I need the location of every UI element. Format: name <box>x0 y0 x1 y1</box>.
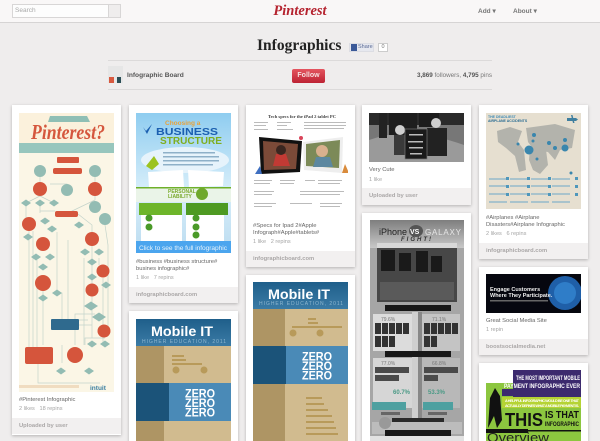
share button <box>349 43 374 52</box>
pin: social media <box>479 267 588 355</box>
caption: busines infographic# <box>136 266 189 272</box>
iphone vs galaxy image: 71.1% <box>432 317 447 323</box>
mobile IT image: ZERO <box>185 408 215 420</box>
nav: about: About ▾ <box>513 8 537 15</box>
share count: 0 <box>381 44 385 50</box>
follow button: Follow <box>297 72 320 79</box>
business structure image: LIABILITY <box>168 194 193 200</box>
flowchart image: intuit <box>90 385 107 392</box>
iphone vs galaxy image: GALAXY <box>425 228 462 237</box>
iphone vs galaxy image: 66.8% <box>432 361 447 367</box>
caption: Great Social Media Site <box>486 318 547 324</box>
mobile IT image: HIGHER EDUCATION, 2011 <box>259 301 343 307</box>
iphone vs galaxy image: 60.7% <box>393 390 411 396</box>
business structure image <box>136 113 231 253</box>
airplane map image <box>486 113 581 209</box>
mobile IT image: Mobile IT <box>151 323 213 339</box>
pin: pinterest flowchart <box>12 105 121 435</box>
airplane map image: THE DEADLIEST <box>488 115 517 119</box>
iphone vs galaxy image: FIGHT! <box>401 237 431 243</box>
stats: 2 likes 6 repins <box>486 230 526 236</box>
iphone vs galaxy image: VS <box>410 229 420 236</box>
kids photo <box>369 113 464 162</box>
business structure image: BUSINESS <box>156 127 218 138</box>
iphone vs galaxy image: 79.6% <box>381 317 396 323</box>
logo: Pinterest <box>273 3 327 19</box>
footer: Uploaded by user <box>369 193 418 199</box>
pin: mobile IT left <box>129 311 238 441</box>
business structure image: Choosing a <box>165 120 201 127</box>
footer: infographicboard.com <box>136 292 197 298</box>
pin: very cute photo <box>362 105 471 205</box>
social banner image: Engage Customers <box>490 287 540 293</box>
footer: boostsocialmedia.net <box>486 344 545 350</box>
caption: Very Cute <box>369 167 394 173</box>
footer <box>479 243 588 259</box>
search box: Search <box>15 7 36 14</box>
board thumbnail <box>108 66 123 83</box>
iphone vs galaxy image <box>370 220 464 441</box>
mobile IT image: ZERO <box>302 370 332 382</box>
footer <box>479 339 588 355</box>
mobile payment image: THIS <box>505 410 543 430</box>
business structure image: Click to see the full infographic <box>139 245 228 252</box>
footer: Uploaded by user <box>19 423 68 429</box>
footer <box>129 287 238 303</box>
mobile IT image: HIGHER EDUCATION, 2011 <box>142 339 226 345</box>
footer <box>246 251 355 267</box>
share count <box>378 43 388 52</box>
share button: Share <box>358 44 373 50</box>
footer: infographicboard.com <box>486 248 547 254</box>
caption: #business #business structure# <box>136 258 217 264</box>
business structure image: PERSONAL <box>168 189 196 195</box>
caption <box>253 222 320 236</box>
footer: infographicboard.com <box>253 256 314 262</box>
stats: 1 like 2 repins <box>253 238 291 244</box>
caption: Infograph#Apple#tablets# <box>253 230 319 236</box>
caption: #Pinterest Infographic <box>19 397 75 403</box>
footer <box>362 188 471 205</box>
ipad specs image <box>254 114 348 207</box>
ipad specs image: Tech specs for the iPad 2 tablet PC <box>268 114 336 119</box>
board info bar <box>108 60 492 90</box>
pin: business structure <box>129 105 238 303</box>
mobile IT image: ZERO <box>185 398 215 410</box>
header bar <box>0 0 600 23</box>
mobile IT image: ZERO <box>302 352 332 364</box>
mobile IT image <box>136 319 231 441</box>
pin: mobile payment <box>479 363 588 441</box>
mobile IT image <box>253 282 348 441</box>
iphone vs galaxy image: 53.3% <box>428 390 446 396</box>
mobile payment image: A HELPFUL INFOGRAPHIC WOULD BE ONE THAT <box>505 399 580 403</box>
stats: 1 like <box>369 176 382 182</box>
follow button <box>292 69 325 83</box>
flowchart image <box>19 113 114 392</box>
nav: add: Add ▾ <box>478 8 496 15</box>
mobile payment image: ACTUALLY DEFINES WHAT A MOBILE PAYMENT IS. <box>505 404 579 408</box>
caption: #Specs for Ipad 2#Apple <box>253 222 316 228</box>
iphone vs galaxy image: 77.0% <box>381 361 396 367</box>
caption <box>136 258 218 272</box>
pin: airplane accidents <box>479 105 588 259</box>
mobile IT image: ZERO <box>302 361 332 373</box>
board name: Infographic Board <box>127 72 184 79</box>
pin: mobile IT center <box>246 275 355 441</box>
stats: 1 repin <box>486 326 503 332</box>
title: Infographics <box>257 37 341 54</box>
pin: iphone vs galaxy <box>362 213 471 441</box>
caption <box>486 214 565 228</box>
mobile IT image: ZERO <box>185 388 215 400</box>
footer <box>12 418 121 434</box>
stats: 2 likes 18 repins <box>19 406 63 412</box>
stats: 1 like 7 repins <box>136 275 174 281</box>
iphone vs galaxy image: iPhone <box>379 227 407 237</box>
pin: ipad specs <box>246 105 355 267</box>
social banner image: Where They Participate. <box>490 293 553 299</box>
mobile IT image: Mobile IT <box>268 286 330 302</box>
airplane map image: AIRPLANE ACCIDENTS <box>488 119 528 123</box>
mobile payment image <box>486 370 581 441</box>
business structure image: STRUCTURE <box>160 136 222 147</box>
social banner image <box>486 274 581 313</box>
caption: Disasters#Airplane Infographic <box>486 222 565 228</box>
caption: #Airplanes #Airplane <box>486 214 540 220</box>
stats: 3,869 followers, 4,795 pins <box>417 72 492 79</box>
search box <box>12 4 121 18</box>
